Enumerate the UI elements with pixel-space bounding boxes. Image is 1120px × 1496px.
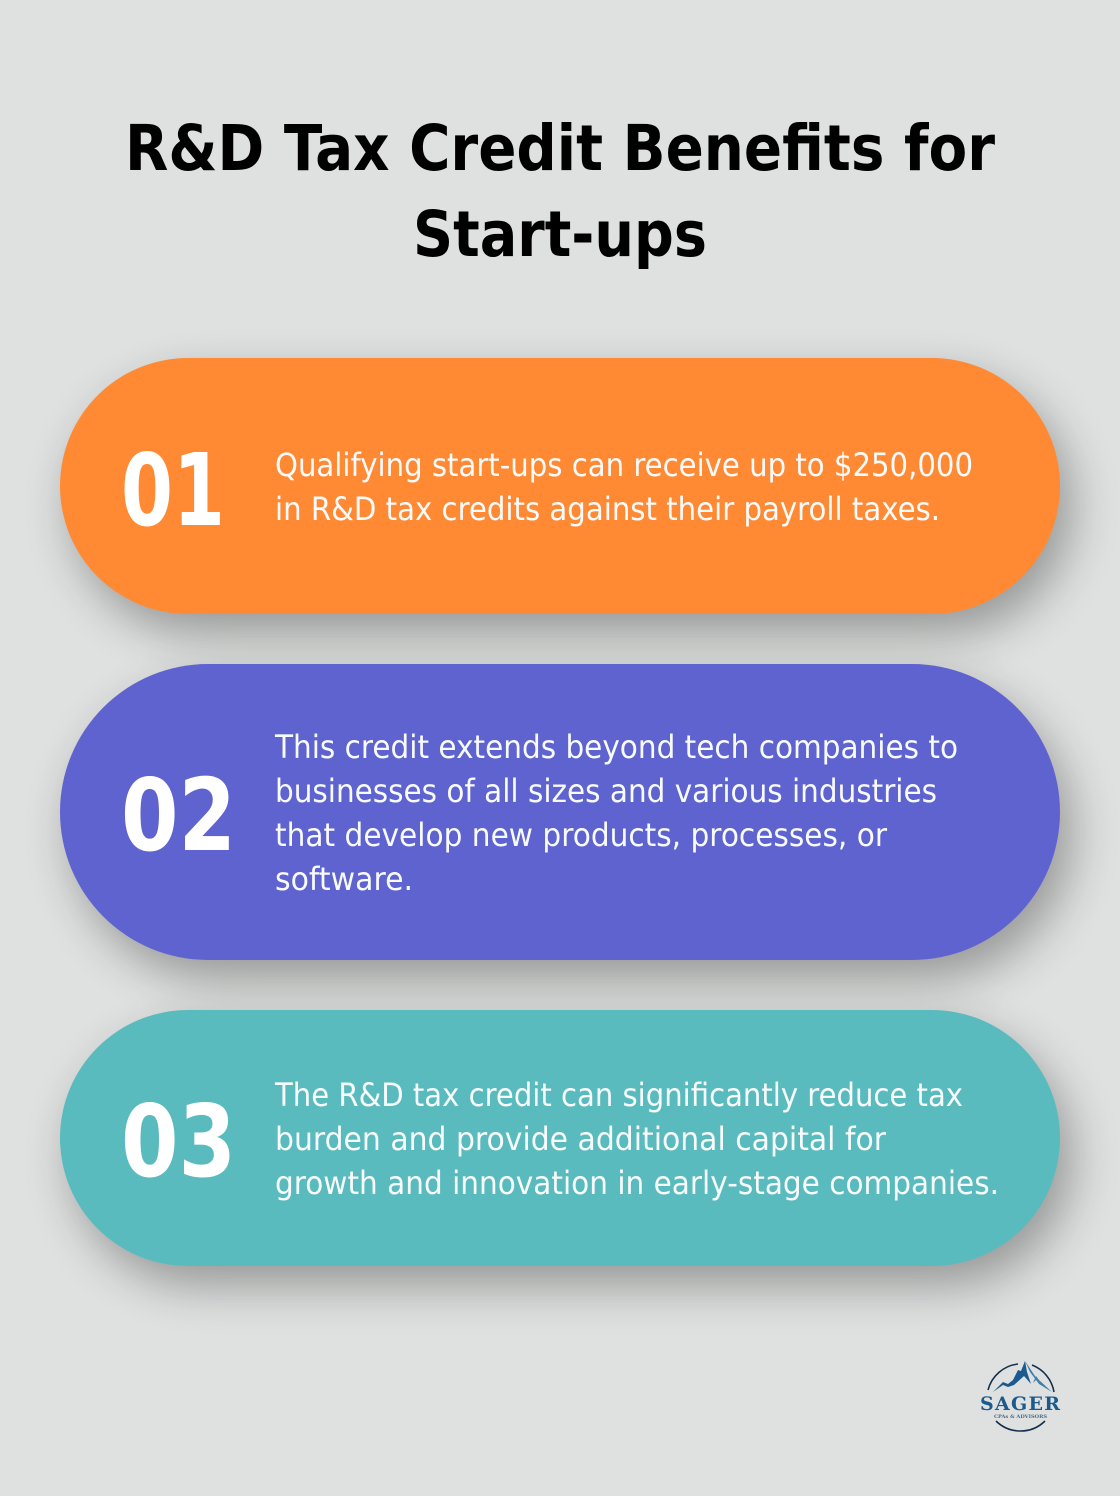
title: Start-ups	[413, 198, 707, 271]
number 03: 03	[121, 1083, 236, 1200]
text: benefit 02: This credit extends beyond tech companies to	[274, 728, 958, 766]
text: benefit 01	[275, 446, 973, 528]
title	[125, 112, 995, 271]
panel: benefit 02	[60, 664, 1060, 960]
number 02: 02	[121, 757, 236, 874]
panel: benefit 03	[60, 1010, 1060, 1266]
text: benefit 03	[274, 1076, 999, 1202]
number 01: 01	[121, 432, 225, 549]
text: benefit 01: in R&D tax credits against their payroll taxes.	[275, 490, 940, 528]
icon: Sager logo: CPAs & ADVISORS	[994, 1414, 1047, 1420]
text: benefit 03: The R&D tax credit can significantly reduce tax	[274, 1076, 963, 1114]
panel: benefit 01	[60, 358, 1060, 614]
title: R&D Tax Credit Benefits for	[125, 112, 995, 185]
icon: Sager logo: SAGER	[980, 1393, 1060, 1415]
text: benefit 02: that develop new products, processes, or	[275, 816, 888, 854]
text: benefit 02: software.	[275, 860, 413, 898]
text: benefit 01: Qualifying start-ups can receive up to $250,000	[275, 446, 973, 484]
text: benefit 03: growth and innovation in early-stage companies.	[275, 1164, 999, 1202]
text: benefit 02: businesses of all sizes and various industries	[275, 772, 937, 810]
text: benefit 02	[274, 728, 958, 898]
text: benefit 03: burden and provide additional capital for	[275, 1120, 887, 1158]
